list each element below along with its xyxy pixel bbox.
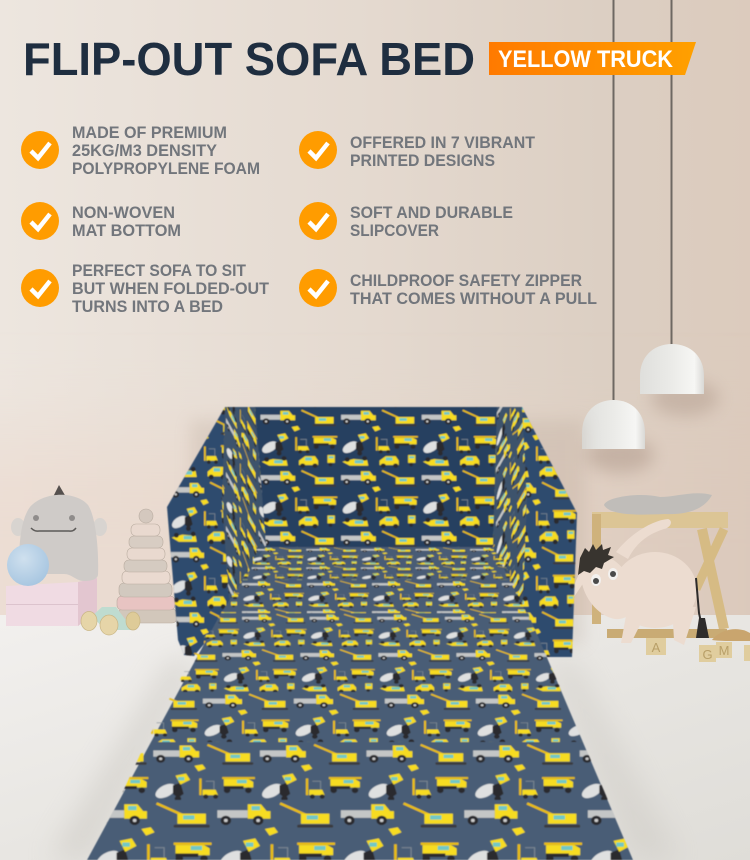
gift box [6, 578, 97, 626]
letter blocks: A [652, 640, 661, 655]
toy car [81, 607, 140, 635]
feature: foam: 25KG/M3 DENSITY [72, 142, 217, 160]
plush monster [11, 485, 107, 581]
right arm [493, 407, 577, 657]
feature: zipper: THAT COMES WITHOUT A PULL [350, 290, 597, 308]
seat [221, 547, 528, 617]
feature: designs: OFFERED IN 7 VIBRANT [350, 134, 535, 152]
ring stacker [117, 509, 177, 623]
toys right: stool, pillow, donkey, blocks [568, 493, 750, 662]
sofa bed [87, 407, 633, 860]
feature: sofa to bed: TURNS INTO A BED [72, 298, 223, 316]
feature: foam: POLYPROPYLENE FOAM [72, 160, 260, 178]
hanging lamps [582, 0, 719, 473]
flip-out mat [87, 613, 633, 860]
pillow [604, 493, 712, 515]
feature: designs [299, 131, 535, 170]
letter blocks [646, 629, 750, 662]
feature: designs: PRINTED DESIGNS [350, 152, 495, 170]
feature: sofa to bed: BUT WHEN FOLDED-OUT [72, 280, 269, 298]
lamp left [582, 400, 645, 449]
letter blocks: G [702, 647, 713, 662]
badge: yellow truck: YELLOW TRUCK [498, 46, 674, 73]
toys left: plush, ball, gift box, stacker, car [6, 485, 177, 635]
sofa shadow on wall [190, 420, 585, 645]
left arm [167, 407, 266, 656]
stool [592, 512, 728, 638]
feature: slipcover [299, 202, 513, 240]
feature: mat bottom [21, 202, 181, 240]
feature: foam: MADE OF PREMIUM [72, 124, 227, 142]
feature: sofa to bed: PERFECT SOFA TO SIT [72, 262, 246, 280]
donkey plush [568, 519, 709, 645]
feature: foam [21, 124, 260, 178]
feature: mat bottom: NON-WOVEN [72, 204, 175, 222]
feature: zipper [299, 269, 597, 308]
feature: mat bottom: MAT BOTTOM [72, 222, 181, 240]
sofa back [252, 407, 500, 548]
feature: slipcover: SOFT AND DURABLE [350, 204, 513, 222]
feature: sofa to bed [21, 262, 269, 316]
letter blocks: M [719, 643, 729, 658]
blue ball [7, 544, 49, 586]
lamp right [640, 344, 704, 394]
feature: zipper: CHILDPROOF SAFETY ZIPPER [350, 272, 582, 290]
title: FLIP-OUT SOFA BED [23, 33, 475, 85]
feature list [21, 124, 597, 316]
feature: slipcover: SLIPCOVER [350, 222, 439, 240]
